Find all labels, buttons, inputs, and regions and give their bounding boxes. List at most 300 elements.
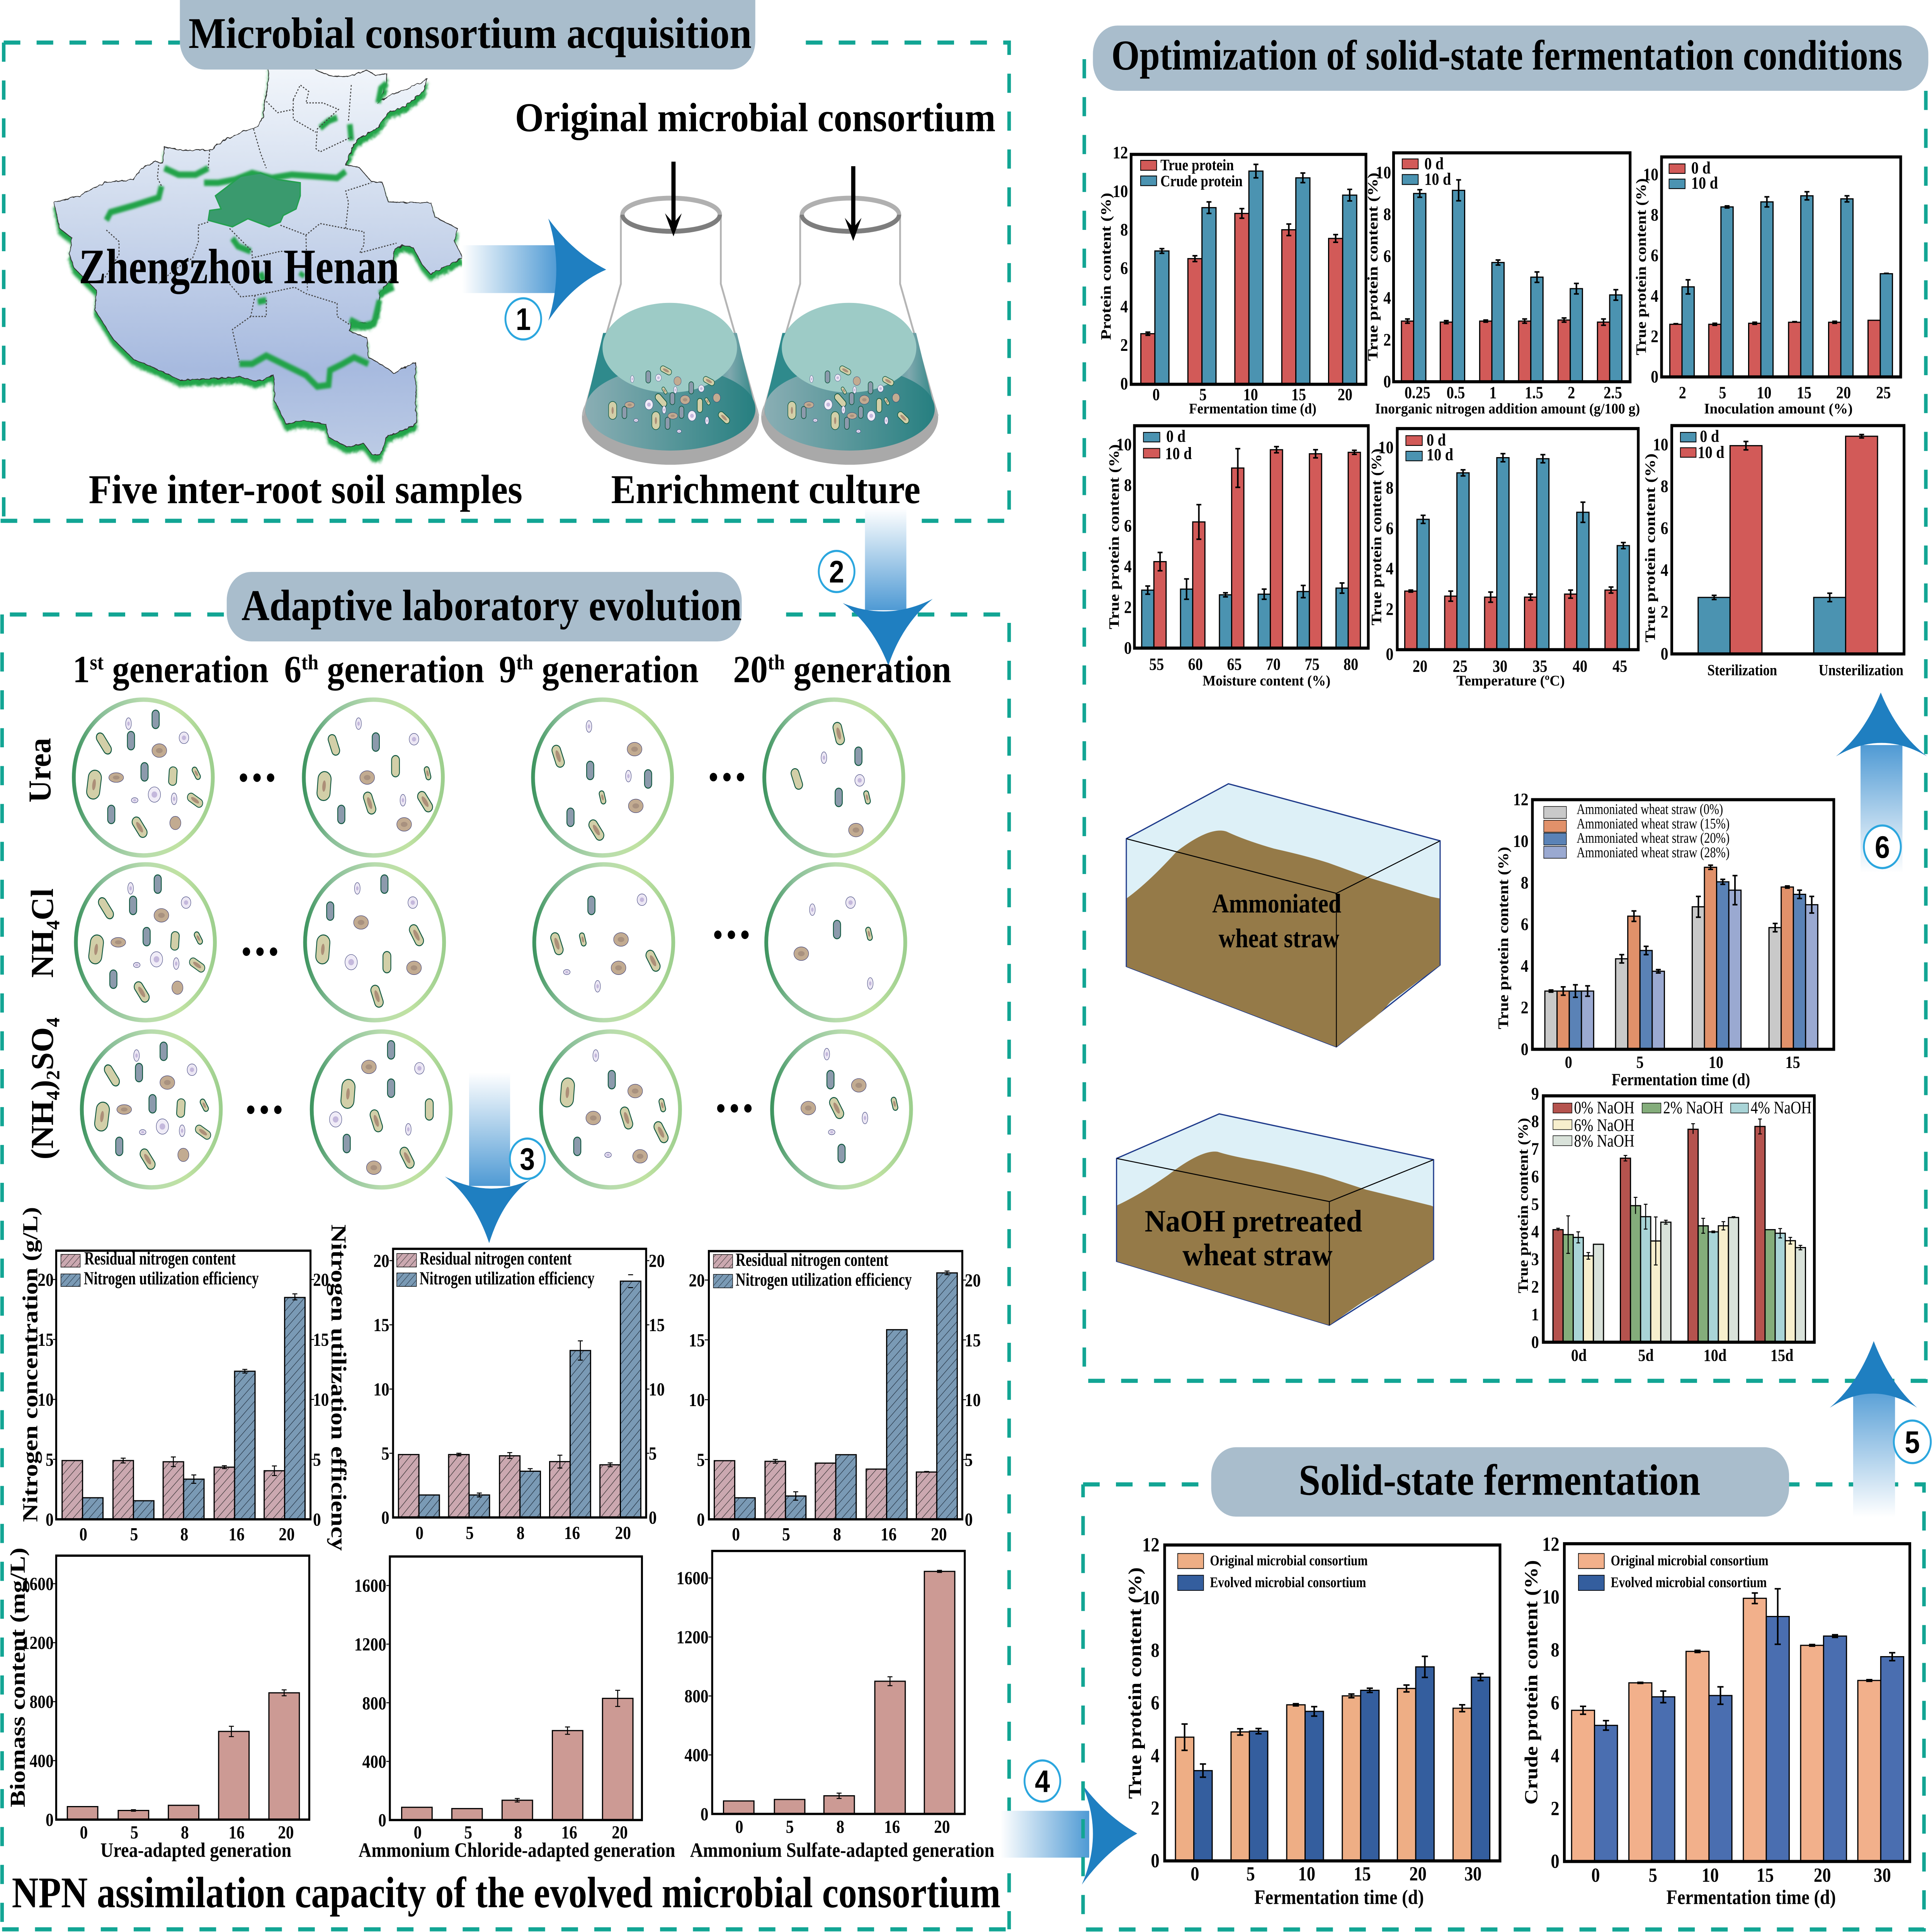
arrow 4: [1000, 1784, 1137, 1884]
chart: crude protein content: 0: [1591, 1864, 1600, 1886]
chart: true protein content: 15: [1354, 1863, 1371, 1885]
chart: NPN ammonium sulfate nitrogen: 5: [782, 1524, 790, 1544]
legend: [1553, 1098, 1811, 1151]
step 4 badge: 4: [1035, 1764, 1050, 1799]
chart: NPN urea nitrogen: 0: [46, 1509, 54, 1530]
generation headers: 6: [284, 648, 301, 691]
chart: inoculation amount: True protein content (%): [1633, 178, 1649, 355]
chart: NPN urea nitrogen: 5: [130, 1524, 138, 1544]
chart: fermentation time: Protein content (%): [1098, 193, 1114, 340]
chart: biomass ammonium chloride: 0: [378, 1810, 386, 1830]
petri row: urea: [74, 700, 903, 855]
chart: NPN ammonium sulfate nitrogen: 5: [965, 1449, 973, 1470]
generation headers: 9: [499, 648, 515, 691]
legend: 10 d: [1697, 443, 1725, 462]
legend: Ammoniated wheat straw (28%): [1577, 844, 1730, 861]
heading pill: Adaptive laboratory evolution: [242, 582, 742, 630]
chart: temperature: 25: [1453, 656, 1468, 675]
step 2 badge: 2: [829, 555, 844, 590]
illustration: ammoniated wheat straw box: [1126, 784, 1440, 1047]
chart: moisture content: 80: [1344, 655, 1358, 673]
chart: sterilization: 4: [1661, 561, 1668, 580]
chart: inoculation amount: 15: [1797, 383, 1811, 402]
chart: inorganic nitrogen addition: 10: [1376, 163, 1391, 182]
heading pill: [180, 0, 755, 70]
legend: Residual nitrogen content: [736, 1249, 888, 1270]
legend: [1578, 1552, 1769, 1590]
legend: Nitrogen utilization efficiency: [736, 1269, 912, 1290]
chart: NaOH pretreated wheat straw: 1: [1531, 1305, 1539, 1325]
chart: sterilization: 6: [1661, 519, 1668, 538]
inoculation arrows: [665, 162, 862, 241]
chart: true protein content: 4: [1151, 1745, 1160, 1767]
chart: NaOH pretreated wheat straw: 2: [1531, 1277, 1539, 1297]
box label: [1212, 889, 1341, 954]
chart: fermentation time: 6: [1120, 259, 1128, 278]
chart: NPN ammonium sulfate nitrogen: 0: [732, 1524, 740, 1544]
chart: crude protein content: 10: [1702, 1864, 1719, 1886]
chart: NPN ammonium chloride nitrogen: 5: [649, 1443, 657, 1464]
label: enrichment culture: Enrichment culture: [611, 466, 920, 512]
chart: moisture content: 0: [1124, 638, 1132, 658]
chart: crude protein content: Fermentation time (d): [1667, 1886, 1836, 1908]
generation headers: th: [301, 651, 318, 674]
chart: NPN ammonium sulfate nitrogen: 16: [881, 1524, 896, 1544]
chart: NPN ammonium chloride nitrogen: 5: [466, 1522, 474, 1543]
chart: ammoniated wheat straw: 4: [1521, 957, 1529, 976]
heading pill: Optimization of solid-state fermentation conditions: [1111, 32, 1902, 79]
chart: NPN ammonium chloride nitrogen: 5: [381, 1443, 389, 1464]
chart: biomass ammonium chloride: Ammonium Chloride-adapted generation: [359, 1838, 675, 1861]
chart: true protein content: 12: [1142, 1534, 1160, 1556]
chart: biomass ammonium chloride: 5: [464, 1822, 472, 1843]
chart: NPN ammonium sulfate nitrogen: [689, 1249, 981, 1544]
petri row: ammonium sulfate: [82, 1032, 911, 1187]
chart: sterilization: 0: [1661, 645, 1668, 664]
legend: Ammoniated wheat straw (20%): [1577, 830, 1730, 846]
chart: crude protein content: 10: [1542, 1586, 1560, 1608]
row labels: (NH₄)₂SO₄: [25, 1017, 60, 1160]
chart: inorganic nitrogen addition: 6: [1383, 247, 1391, 266]
chart: moisture content: Moisture content (%): [1202, 672, 1330, 689]
legend: 8% NaOH: [1574, 1131, 1634, 1151]
chart: NPN ammonium chloride nitrogen: 15: [649, 1315, 665, 1335]
legend: [713, 1249, 912, 1290]
chart: biomass ammonium chloride: 800: [362, 1693, 386, 1713]
chart: crude protein content: 15: [1757, 1864, 1774, 1886]
step 1 badge: [505, 298, 541, 340]
step 6 badge: [1864, 825, 1901, 868]
chart: true protein content: True protein content (%): [1125, 1567, 1145, 1799]
chart: true protein content: Fermentation time (d): [1254, 1886, 1424, 1908]
legend: [1680, 427, 1725, 462]
legend: [1406, 430, 1453, 464]
chart: inoculation amount: 10: [1757, 383, 1771, 402]
heading: NPN assimilation capacity: NPN assimilation capacity of the evolved microbial consortium: [12, 1869, 1000, 1917]
step 1 badge: 1: [516, 302, 531, 337]
chart: NPN urea nitrogen: 0: [79, 1524, 87, 1544]
legend: Ammoniated wheat straw (15%): [1577, 815, 1730, 832]
step 5 badge: [1894, 1420, 1931, 1463]
row labels: [22, 738, 60, 1160]
chart: NPN urea nitrogen: 10: [37, 1389, 54, 1410]
chart: biomass ammonium sulfate: 1600: [677, 1568, 709, 1588]
label: five inter-root soil samples: Five inter-root soil samples: [89, 466, 522, 512]
chart: NPN ammonium chloride nitrogen: 10: [373, 1379, 389, 1400]
legend: Crude protein: [1160, 173, 1243, 190]
arrow 1: [462, 219, 606, 321]
chart: true protein content: 0: [1151, 1850, 1160, 1872]
chart: temperature: True protein content (%): [1368, 449, 1384, 626]
chart: inorganic nitrogen addition: 2: [1383, 330, 1391, 350]
legend: Nitrogen utilization efficiency: [84, 1268, 259, 1288]
chart: crude protein content: 2: [1551, 1798, 1560, 1820]
chart: ammoniated wheat straw: [1495, 790, 1834, 1089]
chart: inoculation amount: Inoculation amount (%): [1704, 400, 1853, 417]
chart: crude protein content: 30: [1874, 1864, 1891, 1886]
chart: biomass urea: 5: [130, 1822, 138, 1843]
panel: solid-state fermentation: [1083, 1447, 1924, 1929]
chart: fermentation time: 10: [1112, 182, 1128, 201]
chart: fermentation time: 15: [1291, 385, 1306, 404]
chart: inorganic nitrogen addition: 2: [1568, 383, 1575, 402]
chart: temperature: 20: [1413, 656, 1427, 675]
chart: fermentation time: 0: [1152, 385, 1160, 404]
chart: inoculation amount: 4: [1651, 286, 1658, 306]
chart: NaOH pretreated wheat straw: 8: [1531, 1112, 1539, 1131]
chart: moisture content: 6: [1124, 517, 1132, 536]
chart: NPN ammonium chloride nitrogen: 0: [381, 1507, 389, 1528]
chart: inorganic nitrogen addition: 0: [1383, 372, 1391, 391]
chart: NPN ammonium sulfate nitrogen: 0: [965, 1509, 973, 1530]
chart: temperature: 2: [1386, 600, 1394, 619]
chart: sterilization: 8: [1661, 477, 1668, 496]
chart: biomass urea: [6, 1548, 309, 1861]
chart: NPN urea nitrogen: 15: [313, 1329, 329, 1350]
illustration: NaOH pretreated wheat straw box: [1117, 1114, 1434, 1325]
legend: Residual nitrogen content: [420, 1248, 572, 1269]
chart: biomass ammonium sulfate: 20: [934, 1816, 950, 1837]
chart: fermentation time: 2: [1120, 336, 1128, 355]
chart: biomass ammonium chloride: [354, 1556, 675, 1861]
generation headers: 20: [733, 648, 766, 691]
chart: NPN ammonium sulfate nitrogen: 15: [965, 1330, 981, 1350]
chart: NPN ammonium sulfate nitrogen: 8: [833, 1524, 841, 1544]
generation headers: th: [768, 651, 785, 674]
step 6 badge: 6: [1875, 830, 1890, 865]
chart: true protein content: 10: [1298, 1863, 1315, 1885]
chart: NPN ammonium chloride nitrogen: [373, 1248, 665, 1543]
chart: fermentation time: Fermentation time (d): [1189, 400, 1316, 417]
panel: microbial consortium acquisition: [1, 0, 1009, 521]
chart: biomass urea: Biomass content (mg/L): [6, 1548, 29, 1807]
chart: inoculation amount: [1633, 157, 1901, 417]
chart: moisture content: 60: [1188, 655, 1203, 673]
legend: 10 d: [1427, 445, 1453, 464]
chart: biomass ammonium sulfate: Ammonium Sulfate-adapted generation: [690, 1838, 994, 1861]
chart: true protein content: [1125, 1534, 1500, 1908]
legend: [397, 1248, 595, 1288]
chart: true protein content: 8: [1151, 1639, 1160, 1662]
chart: fermentation time: 5: [1199, 385, 1207, 404]
legend: Original microbial consortium: [1611, 1552, 1769, 1569]
chart: NPN ammonium chloride nitrogen: 20: [649, 1250, 665, 1271]
chart: biomass ammonium chloride: 16: [561, 1822, 577, 1843]
chart: NaOH pretreated wheat straw: 5d: [1638, 1346, 1654, 1365]
chart: NPN urea nitrogen: 5: [313, 1449, 321, 1470]
chart: inoculation amount: 0: [1651, 367, 1658, 387]
step 4 badge: [1024, 1760, 1060, 1801]
chart: ammoniated wheat straw: 5: [1636, 1053, 1644, 1071]
chart: biomass urea: 400: [30, 1750, 54, 1771]
generation headers: th: [516, 651, 533, 674]
chart: fermentation time: [1098, 143, 1366, 417]
chart: crude protein content: 0: [1551, 1850, 1560, 1872]
step 5 badge: 5: [1905, 1425, 1920, 1460]
chart: NPN ammonium chloride nitrogen: 0: [649, 1507, 657, 1528]
chart: biomass ammonium sulfate: 0: [735, 1816, 743, 1837]
legend: Residual nitrogen content: [84, 1248, 236, 1269]
chart: temperature: 45: [1612, 656, 1627, 675]
legend: Evolved microbial consortium: [1210, 1574, 1366, 1590]
chart: inorganic nitrogen addition: Inorganic nitrogen addition amount (g/100 g): [1375, 400, 1640, 417]
legend: Nitrogen utilization efficiency: [420, 1268, 595, 1288]
legend: 0 d: [1166, 427, 1185, 446]
chart: biomass ammonium chloride: 8: [514, 1822, 522, 1843]
row labels: Urea: [22, 738, 58, 803]
heading pill: [227, 572, 742, 641]
chart: NPN urea nitrogen: 8: [180, 1524, 188, 1544]
box label: [1145, 1204, 1362, 1272]
chart: sterilization: Unsterilization: [1819, 662, 1903, 679]
chart: fermentation time: 0: [1120, 374, 1128, 393]
chart: inorganic nitrogen addition: 4: [1383, 288, 1391, 308]
chart: crude protein content: 5: [1649, 1864, 1657, 1886]
heading pill: [1211, 1447, 1789, 1517]
chart: inorganic nitrogen addition: 0.25: [1405, 383, 1430, 402]
chart: NPN ammonium chloride nitrogen: 0: [415, 1522, 423, 1543]
chart: inorganic nitrogen addition: True protein content (%): [1365, 173, 1381, 361]
box label: wheat straw: [1219, 924, 1339, 954]
chart: temperature: 0: [1386, 645, 1394, 664]
legend: [1402, 154, 1451, 189]
chart: moisture content: [1106, 426, 1368, 689]
chart: temperature: 30: [1493, 656, 1507, 675]
chart: NPN urea nitrogen: 16: [229, 1524, 245, 1544]
chart: NaOH pretreated wheat straw: 7: [1531, 1139, 1539, 1159]
generation headers: [73, 648, 951, 691]
flask 2: [761, 198, 938, 465]
chart: true protein content: 0: [1190, 1863, 1199, 1885]
chart: NaOH pretreated wheat straw: True protein content (%): [1515, 1118, 1531, 1293]
legend: 2% NaOH: [1663, 1098, 1723, 1117]
arrow 2: [843, 508, 933, 665]
chart: inoculation amount: 2: [1651, 327, 1658, 346]
chart: ammoniated wheat straw: 10: [1709, 1053, 1723, 1071]
chart: NaOH pretreated wheat straw: 10d: [1704, 1346, 1726, 1365]
chart: NPN ammonium sulfate nitrogen: 20: [689, 1270, 705, 1291]
legend: [61, 1248, 259, 1288]
chart: NaOH pretreated wheat straw: 0d: [1571, 1346, 1587, 1365]
legend: 0 d: [1700, 427, 1719, 446]
chart: ammoniated wheat straw: 15: [1786, 1053, 1800, 1071]
box label: Ammoniated: [1212, 889, 1341, 919]
chart: biomass urea: 1600: [22, 1574, 54, 1594]
legend: 0 d: [1427, 430, 1446, 449]
chart: biomass urea: 8: [181, 1822, 189, 1843]
chart: moisture content: 8: [1124, 476, 1132, 495]
chart: temperature: 4: [1386, 559, 1394, 578]
chart: NPN ammonium chloride nitrogen: 16: [564, 1522, 580, 1543]
chart: NPN urea nitrogen: Nitrogen utilization efficiency: [327, 1225, 350, 1551]
chart: biomass ammonium chloride: 400: [362, 1751, 386, 1772]
chart: moisture content: 4: [1124, 557, 1132, 577]
chart: crude protein content: 12: [1542, 1534, 1560, 1555]
chart: ammoniated wheat straw: 0: [1521, 1040, 1529, 1059]
chart: NPN urea nitrogen: Nitrogen concentration (g/L): [18, 1207, 42, 1522]
legend: 4% NaOH: [1751, 1098, 1811, 1117]
chart: crude protein content: 8: [1551, 1639, 1560, 1661]
chart: NPN urea nitrogen: 20: [37, 1269, 54, 1290]
legend: 6% NaOH: [1574, 1116, 1634, 1135]
legend: 0 d: [1691, 158, 1711, 177]
panel: optimization of solid-state fermentation conditions: [1084, 26, 1928, 1381]
legend: Ammoniated wheat straw (0%): [1577, 801, 1723, 817]
legend: 10 d: [1165, 444, 1192, 463]
chart: ammoniated wheat straw: 8: [1521, 873, 1529, 893]
chart: NPN ammonium sulfate nitrogen: 15: [689, 1330, 705, 1350]
chart: inoculation amount: 25: [1876, 383, 1891, 402]
chart: temperature: [1368, 429, 1638, 689]
chart: sterilization: 2: [1661, 602, 1668, 622]
chart: NaOH pretreated wheat straw: 4: [1531, 1222, 1539, 1242]
map: Henan province: [54, 65, 463, 461]
chart: NPN ammonium sulfate nitrogen: 10: [689, 1389, 705, 1410]
chart: ammoniated wheat straw: Fermentation time (d): [1612, 1070, 1750, 1089]
legend: [1544, 801, 1730, 861]
chart: crude protein content: 6: [1551, 1692, 1560, 1714]
chart: fermentation time: 20: [1338, 385, 1352, 404]
chart: biomass ammonium sulfate: 16: [884, 1816, 900, 1837]
step 3 badge: [510, 1139, 545, 1179]
chart: biomass urea: 1200: [22, 1633, 54, 1653]
chart: inorganic nitrogen addition: 0.5: [1447, 383, 1465, 402]
chart: NPN ammonium sulfate nitrogen: 5: [697, 1449, 705, 1470]
chart: moisture content: 10: [1116, 435, 1132, 454]
map label: Zhengzhou Henan: [79, 240, 399, 294]
chart: ammoniated wheat straw: 12: [1513, 790, 1529, 810]
chart: sterilization: True protein content (%): [1642, 453, 1658, 643]
chart: crude protein content: 4: [1551, 1745, 1560, 1767]
chart: biomass ammonium chloride: 1200: [354, 1634, 386, 1655]
chart: temperature: Temperature (ºC): [1456, 672, 1565, 689]
chart: biomass ammonium sulfate: 8: [836, 1816, 844, 1837]
panel: adaptive laboratory evolution: [2, 508, 1009, 1929]
chart: ammoniated wheat straw: 2: [1521, 998, 1529, 1017]
chart: moisture content: True protein content (%): [1106, 444, 1122, 629]
chart: NaOH pretreated wheat straw: 3: [1531, 1250, 1539, 1269]
chart: NaOH pretreated wheat straw: [1515, 1084, 1814, 1365]
chart: inoculation amount: 10: [1643, 165, 1658, 184]
legend: [1141, 156, 1243, 190]
chart: ammoniated wheat straw: 10: [1513, 832, 1529, 851]
chart: inorganic nitrogen addition: 1: [1489, 383, 1497, 402]
chart: NaOH pretreated wheat straw: 6: [1531, 1167, 1539, 1187]
chart: NPN ammonium sulfate nitrogen: 20: [931, 1524, 947, 1544]
chart: NPN ammonium chloride nitrogen: 20: [615, 1522, 631, 1543]
row labels: NH₄Cl: [25, 888, 60, 978]
chart: moisture content: 70: [1266, 655, 1281, 673]
chart: fermentation time: 4: [1120, 297, 1128, 316]
petri row: ammonium chloride: [76, 864, 905, 1020]
chart: fermentation time: 12: [1112, 143, 1128, 163]
legend: 10 d: [1424, 170, 1451, 189]
chart: NPN ammonium sulfate nitrogen: 10: [965, 1389, 981, 1410]
chart: biomass urea: 0: [80, 1822, 88, 1843]
chart: NPN ammonium sulfate nitrogen: 0: [697, 1509, 705, 1530]
chart: biomass ammonium chloride: 1600: [354, 1575, 386, 1596]
chart: inoculation amount: 5: [1719, 383, 1726, 402]
chart: inorganic nitrogen addition: 1.5: [1525, 383, 1543, 402]
chart: fermentation time: 8: [1120, 220, 1128, 240]
chart: inorganic nitrogen addition: 8: [1383, 205, 1391, 224]
chart: temperature: 40: [1573, 656, 1587, 675]
chart: biomass ammonium chloride: 0: [414, 1822, 422, 1843]
chart: sterilization: Sterilization: [1708, 662, 1777, 679]
chart: inoculation amount: 8: [1651, 206, 1658, 225]
chart: fermentation time: 10: [1243, 385, 1258, 404]
generation headers: generation: [104, 648, 269, 691]
arrow 6: [1836, 692, 1927, 873]
chart: true protein content: 6: [1151, 1692, 1160, 1714]
chart: inorganic nitrogen addition: [1365, 153, 1640, 417]
chart: biomass ammonium sulfate: 800: [684, 1686, 709, 1706]
chart: true protein content: 5: [1246, 1863, 1255, 1885]
chart: NaOH pretreated wheat straw: 9: [1531, 1084, 1539, 1104]
chart: moisture content: 65: [1227, 655, 1242, 673]
legend: [1178, 1552, 1368, 1590]
step 3 badge: 3: [520, 1142, 535, 1177]
chart: NPN ammonium chloride nitrogen: 15: [373, 1315, 389, 1335]
legend: Original microbial consortium: [1210, 1552, 1368, 1569]
heading pill: Microbial consortium acquisition: [189, 9, 752, 58]
legend: 0% NaOH: [1574, 1098, 1634, 1117]
chart: crude protein content: 20: [1814, 1864, 1831, 1886]
chart: biomass urea: 20: [278, 1822, 294, 1843]
chart: true protein content: 20: [1409, 1863, 1427, 1885]
legend: [1143, 427, 1192, 463]
chart: NPN urea nitrogen: [18, 1207, 350, 1551]
chart: inoculation amount: 2: [1679, 383, 1686, 402]
chart: temperature: 35: [1532, 656, 1547, 675]
generation headers: 1: [73, 648, 89, 691]
chart: NPN urea nitrogen: 0: [313, 1509, 321, 1530]
chart: NPN urea nitrogen: 15: [37, 1329, 54, 1350]
chart: temperature: 6: [1386, 519, 1394, 538]
chart: NPN ammonium chloride nitrogen: 10: [649, 1379, 665, 1400]
chart: biomass ammonium chloride: 20: [612, 1822, 628, 1843]
legend: True protein: [1160, 156, 1234, 174]
chart: moisture content: 2: [1124, 598, 1132, 617]
chart: inoculation amount: 6: [1651, 246, 1658, 265]
chart: biomass ammonium sulfate: 5: [786, 1816, 794, 1837]
chart: biomass ammonium sulfate: 400: [684, 1745, 709, 1765]
legend: 0 d: [1424, 154, 1444, 173]
chart: sterilization: 10: [1653, 435, 1668, 454]
chart: crude protein content: [1521, 1534, 1910, 1908]
generation headers: generation: [785, 648, 951, 691]
arrow 5: [1830, 1341, 1917, 1517]
